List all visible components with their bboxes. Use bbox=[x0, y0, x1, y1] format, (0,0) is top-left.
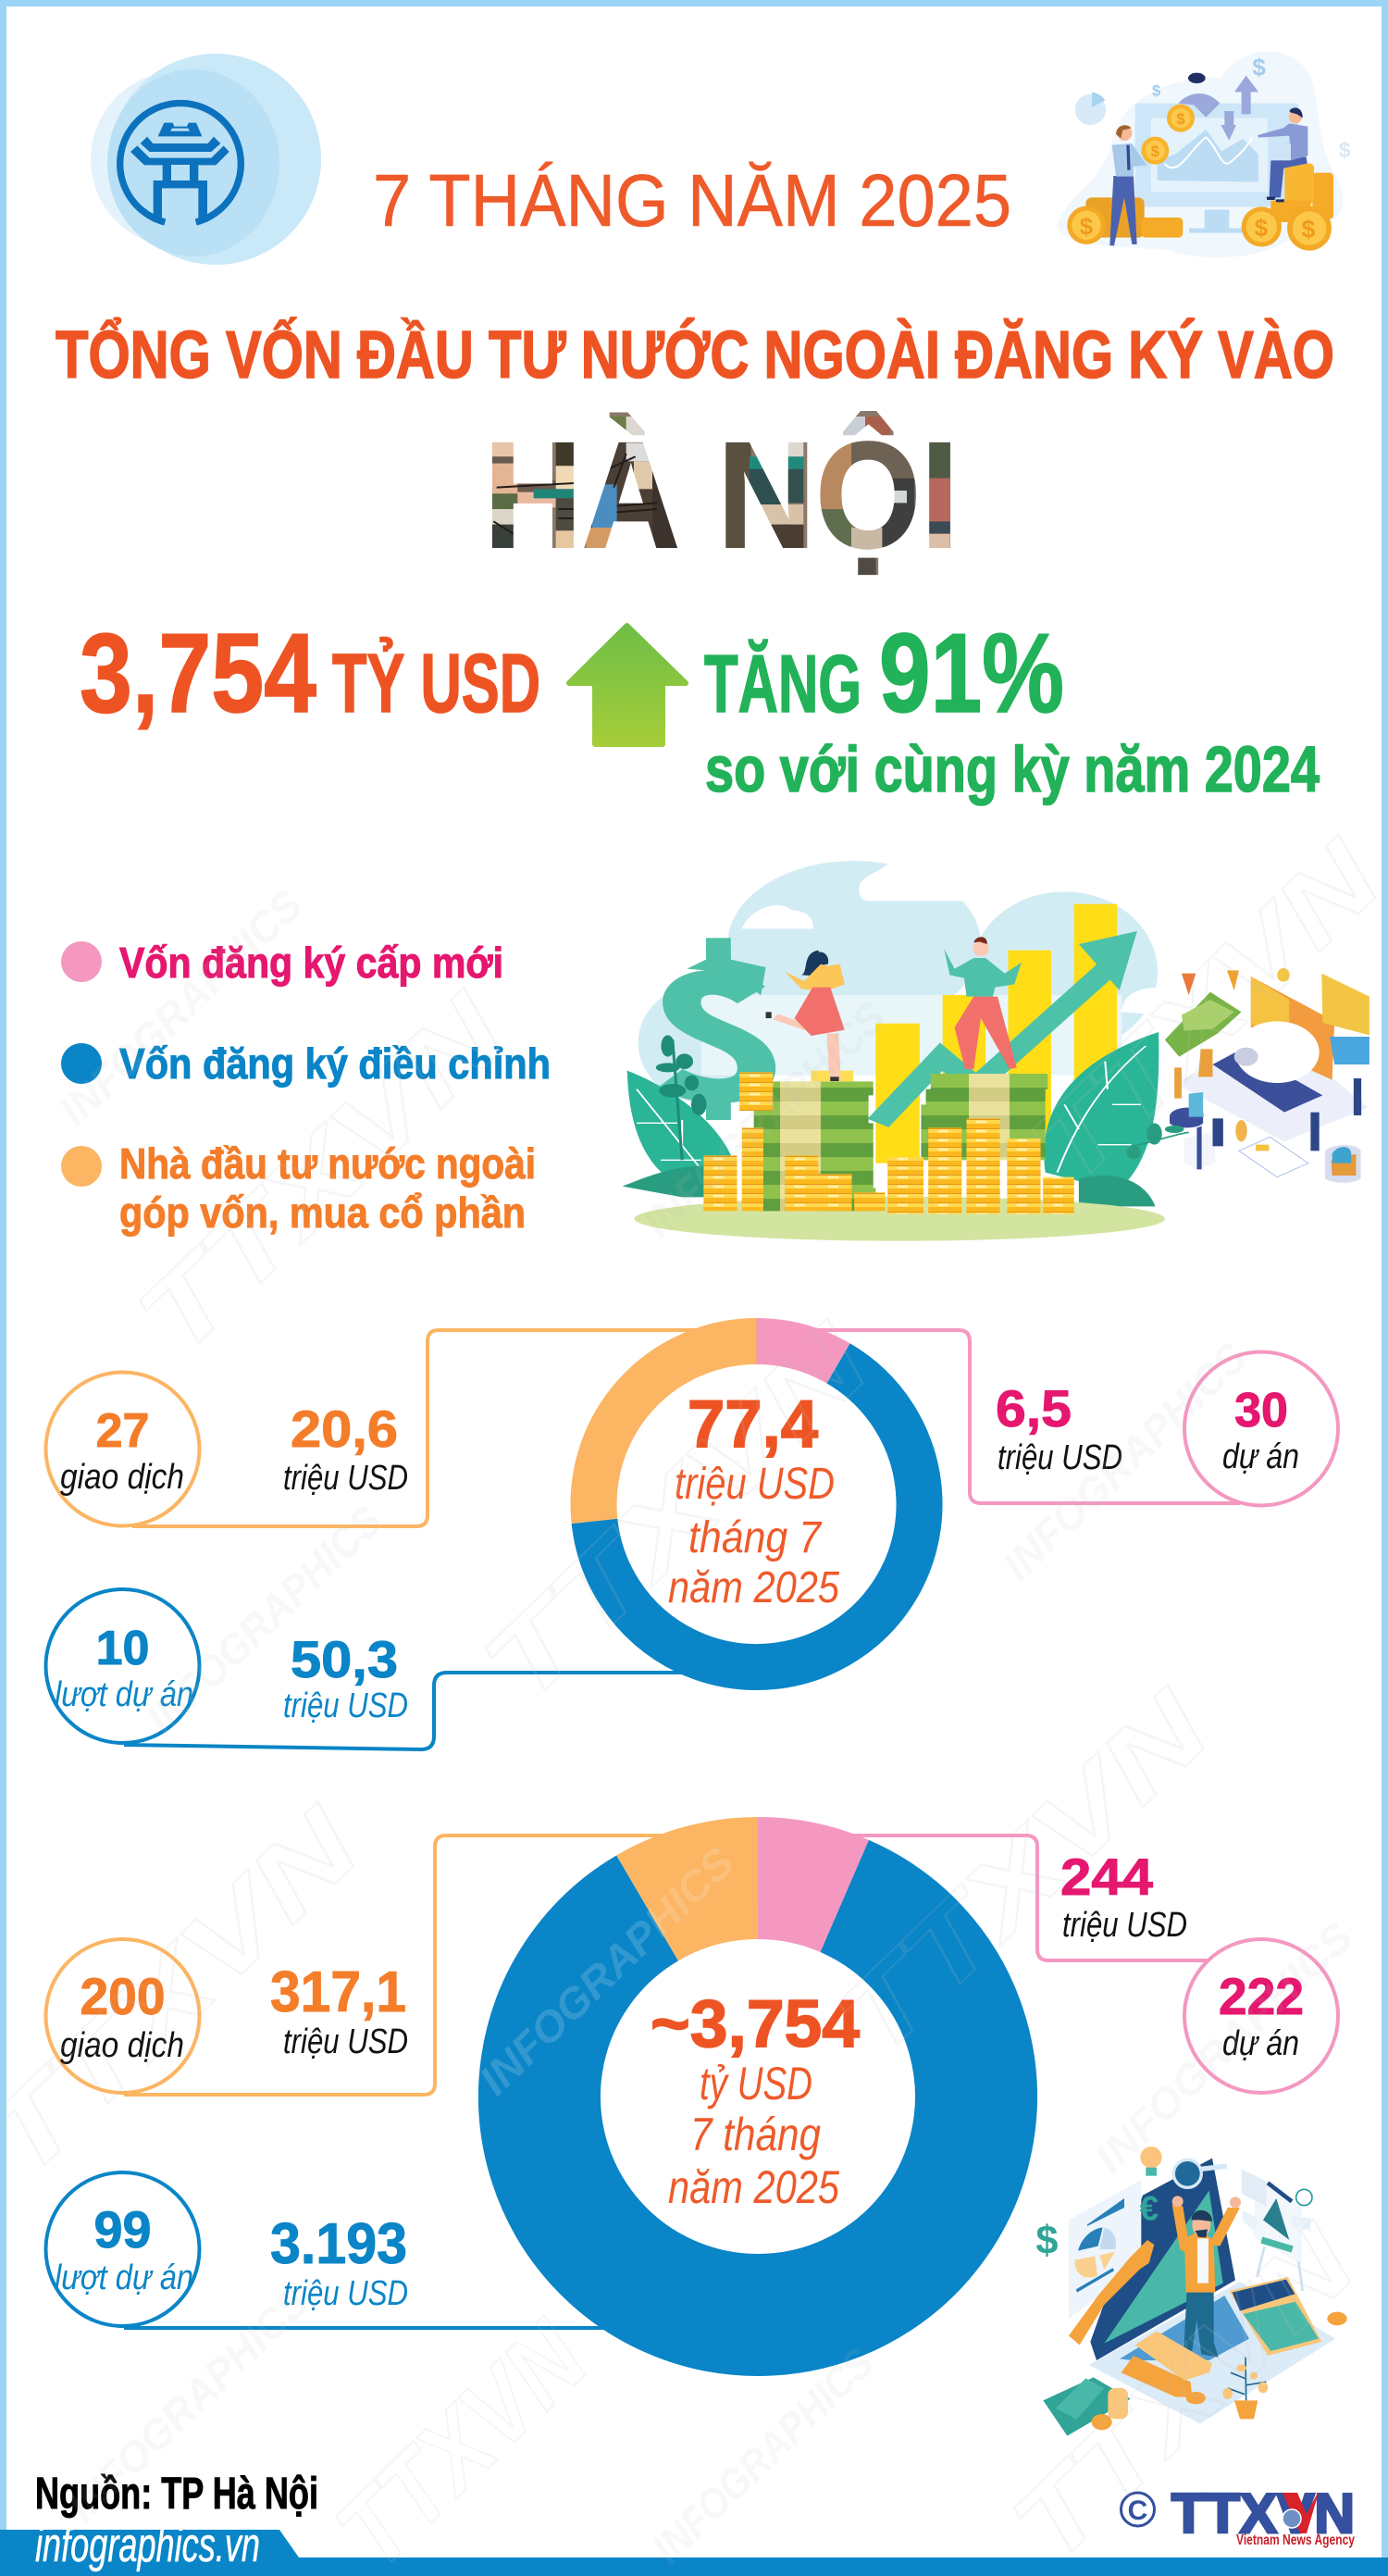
ground bbox=[634, 1197, 1165, 1241]
donut centre label: 7 months: tỷ USD bbox=[700, 2058, 812, 2109]
headline: growth: TĂNG bbox=[704, 638, 861, 729]
coin stacks behind people bbox=[1085, 164, 1333, 238]
donut centre label: July bbox=[668, 1388, 839, 1612]
callout: adjusted capital, 7 months: 3.193 bbox=[270, 2212, 407, 2276]
text: TTXVN bbox=[116, 971, 529, 1376]
isometric piggy bank scene bbox=[1174, 1034, 1368, 1141]
headline: growth bbox=[704, 610, 1320, 805]
logo: Hanoi emblem bbox=[91, 54, 321, 265]
illustration: man on laptop with finance icons: $ bbox=[1035, 2219, 1058, 2263]
donut centre label: 7 months: năm 2025 bbox=[668, 2161, 839, 2213]
segment: adjusted capital bbox=[539, 1896, 976, 2315]
connector lines, chart 1 bbox=[124, 1330, 1240, 1749]
donut centre label: July: 77,4 bbox=[688, 1388, 818, 1462]
gold bars bbox=[1122, 2356, 1192, 2397]
illustration: investors with monitor and coins bbox=[1058, 52, 1351, 257]
callout: contribution, 7 months: giao dịch bbox=[60, 2026, 184, 2065]
callout: adjusted capital, July bbox=[46, 1589, 408, 1743]
segment: new capital bbox=[757, 1341, 838, 1363]
callout: new capital, 7 months: 222 bbox=[1219, 1967, 1304, 2025]
segment: contribution bbox=[648, 1878, 758, 1908]
text: INFOGRAPHICS bbox=[1085, 1912, 1362, 2182]
period heading: 7 THÁNG NĂM 2025 bbox=[373, 159, 1011, 242]
legend: capital contribution: góp vốn, mua cổ phần bbox=[119, 1188, 526, 1237]
callout: contribution, 7 months: triệu USD bbox=[283, 2022, 408, 2061]
text: INFOGRAPHICS bbox=[470, 1837, 743, 2104]
callout: adjusted capital, July: 10 bbox=[96, 1622, 149, 1675]
callout: contribution, 7 months: 317,1 bbox=[270, 1960, 406, 2024]
text: INFOGRAPHICS bbox=[50, 880, 311, 1135]
text: INFOGRAPHICS bbox=[634, 992, 895, 1247]
legend: new registered capital: Vốn đăng ký cấp mới bbox=[119, 939, 503, 987]
donut chart: July 2025 bbox=[594, 1341, 920, 1667]
calculator bbox=[1229, 2277, 1321, 2356]
text: TTXVN bbox=[461, 1302, 892, 1724]
text: TTXVN bbox=[990, 2203, 1378, 2576]
legend: capital contribution: Nhà đầu tư nước ngoài bbox=[119, 1139, 536, 1188]
text: INFOGRAPHICS bbox=[138, 1496, 391, 1743]
donut centre label: July: triệu USD bbox=[675, 1460, 835, 1509]
bars bbox=[875, 1024, 920, 1164]
footer band with site name: infographics.vn bbox=[35, 2519, 260, 2572]
illustration: investors with monitor and coins: $ bbox=[1176, 110, 1185, 128]
callout: adjusted capital, 7 months: lượt dự án bbox=[55, 2259, 193, 2297]
callout: new capital, 7 months: 244 bbox=[1060, 1848, 1153, 1906]
illustration: man on laptop with finance icons: € bbox=[1140, 2189, 1159, 2227]
callout: adjusted capital, July: 50,3 bbox=[291, 1630, 398, 1688]
illustration: investors with monitor and coins: $ bbox=[1151, 143, 1160, 160]
illustration: investors with monitor and coins: $ bbox=[1080, 212, 1094, 240]
icon: up arrow bbox=[569, 626, 686, 744]
place name with photo fill: HÀ NỘI bbox=[484, 410, 959, 579]
legend: capital contribution bbox=[61, 1139, 536, 1237]
callout: contribution, July: 27 bbox=[96, 1404, 149, 1458]
callout: adjusted capital, 7 months bbox=[46, 2172, 408, 2326]
illustration: investors with monitor and coins: $ bbox=[1255, 214, 1269, 242]
callout: contribution, July bbox=[46, 1372, 408, 1525]
callout: new capital, July: 30 bbox=[1234, 1384, 1288, 1437]
right chart board bbox=[1254, 2178, 1302, 2265]
text: TTXVN bbox=[814, 1669, 1233, 2078]
callout: adjusted capital, July: lượt dự án bbox=[55, 1675, 193, 1714]
dollar sign bbox=[670, 982, 757, 1091]
callout: new capital, July: triệu USD bbox=[998, 1438, 1122, 1477]
text: INFOGRAPHICS bbox=[643, 2338, 883, 2572]
headline: growth: 91% bbox=[879, 610, 1064, 736]
money and coins bbox=[1043, 2377, 1131, 2436]
callout: adjusted capital, 7 months: triệu USD bbox=[283, 2274, 408, 2313]
callout: new capital, 7 months bbox=[1060, 1848, 1338, 2093]
illustration: man on laptop with finance icons bbox=[1035, 2147, 1347, 2436]
source: Nguồn: TP Hà Nội bbox=[35, 2470, 318, 2519]
illustration: investors with monitor and coins: $ bbox=[1252, 54, 1266, 81]
callout: adjusted capital, 7 months: 99 bbox=[94, 2200, 152, 2259]
footer band with site name bbox=[0, 2519, 1388, 2576]
illustration: investors with monitor and coins: $ bbox=[1339, 138, 1351, 162]
headline: total capital: TỶ USD bbox=[332, 637, 540, 730]
connector lines, chart 2 bbox=[124, 1836, 1208, 2328]
donut centre label: 7 months: ~3,754 bbox=[651, 1987, 860, 2061]
illustration: investors with monitor and coins: $ bbox=[1152, 81, 1161, 99]
segment: new capital bbox=[758, 1878, 845, 1896]
text: INFOGRAPHICS bbox=[58, 2277, 318, 2531]
callout: contribution, 7 months: 200 bbox=[80, 1967, 165, 2025]
callout: contribution, July: 20,6 bbox=[291, 1400, 398, 1458]
woman bbox=[833, 1034, 835, 1079]
illustration: people on money stacks with growth chart bbox=[623, 858, 1369, 1241]
callout: new capital, 7 months: triệu USD bbox=[1062, 1906, 1187, 1945]
left man bbox=[1109, 176, 1137, 245]
callout: contribution, 7 months bbox=[46, 1939, 408, 2093]
coin stacks bbox=[703, 1072, 1074, 1214]
text: INFOGRAPHICS bbox=[993, 1333, 1256, 1589]
callout: adjusted capital, July: triệu USD bbox=[283, 1686, 408, 1725]
donut centre label: July: tháng 7 bbox=[688, 1513, 823, 1562]
growth arrow bbox=[878, 964, 1112, 1123]
man bbox=[955, 997, 1017, 1069]
donut centre label: July: năm 2025 bbox=[668, 1563, 839, 1612]
callout: contribution, July: triệu USD bbox=[283, 1459, 408, 1498]
callout: new capital, July: dự án bbox=[1222, 1437, 1299, 1476]
callout: new capital, July bbox=[996, 1351, 1338, 1505]
callout: new capital, July: 6,5 bbox=[996, 1379, 1072, 1437]
money stacks bbox=[754, 1081, 875, 1211]
donut centre label: 7 months bbox=[651, 1987, 860, 2213]
big coins bbox=[1067, 206, 1106, 244]
legend bbox=[61, 939, 551, 1237]
agency logo: C bbox=[1128, 2495, 1147, 2526]
illustration: investors with monitor and coins: $ bbox=[1302, 216, 1316, 243]
segment: contribution bbox=[594, 1341, 757, 1521]
man bbox=[1184, 2289, 1219, 2358]
callout: contribution, July: giao dịch bbox=[60, 1458, 184, 1497]
headline: total capital: 3,754 bbox=[80, 610, 316, 736]
segment: adjusted capital bbox=[594, 1363, 920, 1667]
callout: new capital, 7 months: dự án bbox=[1222, 2024, 1299, 2063]
text: TTXVN bbox=[1009, 818, 1388, 1205]
leaves bbox=[627, 1071, 737, 1194]
right man bbox=[1270, 156, 1307, 197]
headline: total capital bbox=[80, 610, 540, 736]
legend: adjusted capital: Vốn đăng ký điều chỉnh bbox=[119, 1039, 551, 1088]
donut centre label: 7 months: 7 tháng bbox=[690, 2109, 821, 2160]
donut chart: 7 months 2025 bbox=[539, 1878, 976, 2315]
plant bbox=[1228, 2358, 1266, 2400]
agency logo: TTXVN bbox=[1171, 2483, 1355, 2545]
